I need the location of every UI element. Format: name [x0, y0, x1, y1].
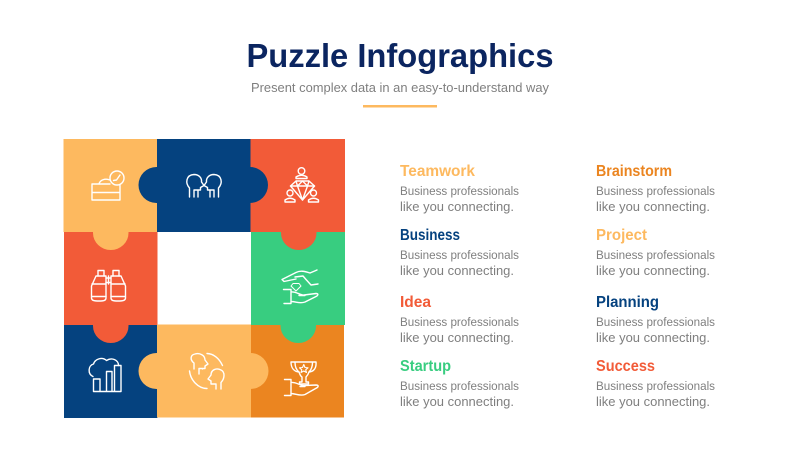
item: Business: Business — [400, 227, 460, 244]
item: Brainstorm — [596, 163, 715, 214]
icon: cloud with bar chart — [89, 359, 121, 392]
item: Business: Business professionals — [400, 248, 519, 262]
item: Business: like you connecting. — [400, 264, 514, 278]
icon: two heads — [187, 174, 221, 197]
title: Puzzle Infographics — [246, 37, 554, 74]
item: Teamwork: like you connecting. — [400, 200, 514, 214]
item: Success: like you connecting. — [596, 395, 710, 409]
item: Planning: Planning — [596, 294, 659, 311]
item: Teamwork: Teamwork — [400, 163, 475, 180]
piece: idea — [64, 232, 158, 325]
tab: planning downward — [280, 325, 316, 343]
tab: teamwork downward — [93, 232, 128, 250]
tab: brainstorm downward — [281, 232, 316, 250]
item: Teamwork — [400, 163, 519, 214]
item: Startup — [400, 358, 519, 409]
tab: idea downward — [93, 325, 128, 343]
item: Idea: Idea — [400, 294, 431, 311]
item: Success: Success — [596, 358, 655, 375]
item: Success: Business professionals — [596, 379, 715, 393]
item: Planning: like you connecting. — [596, 331, 710, 345]
icon: cake with clock — [92, 171, 124, 200]
item: Idea — [400, 294, 519, 345]
piece: brainstorm — [250, 139, 345, 232]
tab: project right — [250, 353, 268, 389]
piece: startup — [64, 325, 158, 418]
item: Brainstorm: Business professionals — [596, 184, 715, 198]
icon: heads with rotating arrows — [190, 354, 224, 389]
item: Teamwork: Business professionals — [400, 184, 519, 198]
accent underline — [363, 105, 437, 108]
item: Startup: Business professionals — [400, 379, 519, 393]
item: Startup: Startup — [400, 358, 451, 375]
item: Project: Business professionals — [596, 248, 715, 262]
puzzle grid — [64, 139, 345, 418]
item: Brainstorm: Brainstorm — [596, 163, 672, 180]
icon: diamond and people — [285, 168, 318, 202]
piece: teamwork — [64, 139, 158, 232]
item: Startup: like you connecting. — [400, 395, 514, 409]
tab: project left — [138, 353, 158, 389]
item: Business — [400, 227, 519, 278]
item: Idea: Business professionals — [400, 315, 519, 329]
item: Success — [596, 358, 715, 409]
item: Planning — [596, 294, 715, 345]
item: Project: Project — [596, 227, 647, 244]
piece: success — [251, 325, 344, 418]
piece: business with side tabs — [138, 139, 268, 232]
item: Idea: like you connecting. — [400, 331, 514, 345]
item: Planning: Business professionals — [596, 315, 715, 329]
piece: planning — [251, 232, 345, 325]
item: Project: like you connecting. — [596, 264, 710, 278]
subtitle: Present complex data in an easy-to-understand way — [251, 80, 549, 95]
icon: trophy on hand — [284, 362, 318, 396]
icon: binoculars — [92, 270, 126, 301]
item: Project — [596, 227, 715, 278]
icon: hands holding diamond — [282, 270, 318, 304]
item: Brainstorm: like you connecting. — [596, 200, 710, 214]
piece: project — [157, 324, 251, 418]
